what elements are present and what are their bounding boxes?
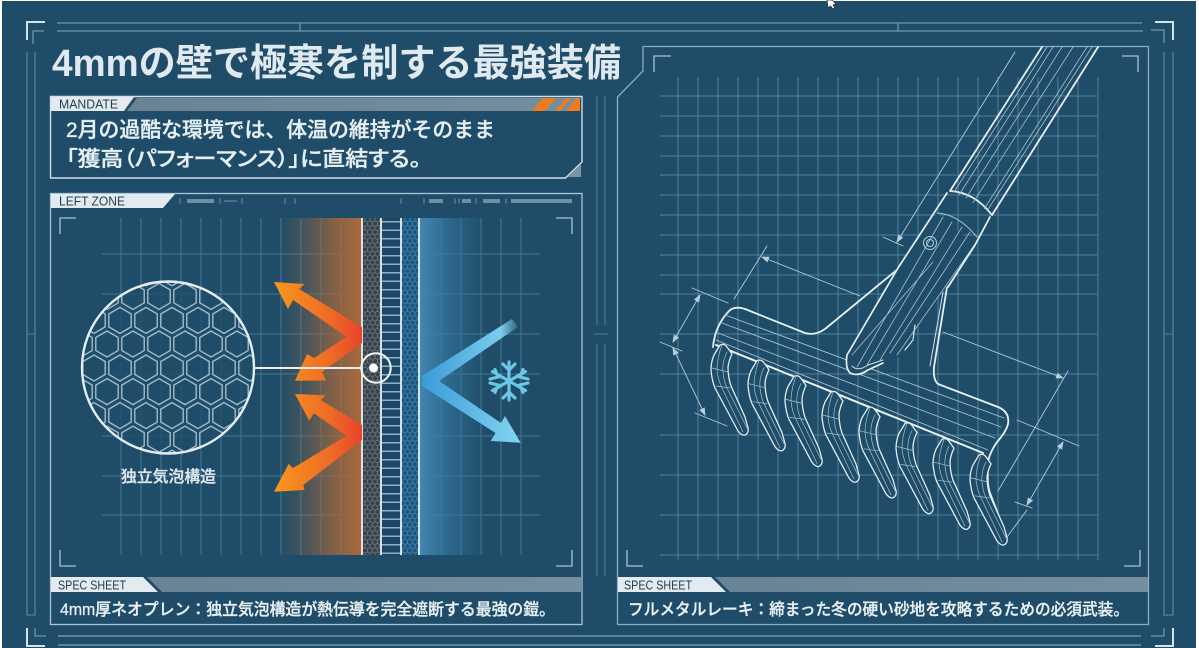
- bolt: [924, 236, 936, 250]
- rake head: [713, 269, 1008, 535]
- spec text: フルメタルレーキ：締まった冬の硬い砂地を攻略するための必須武装。: [628, 600, 1129, 619]
- neoprene wall cross-section: [362, 218, 419, 555]
- left zone tab: [51, 194, 175, 208]
- cold gradient zone: [419, 218, 487, 555]
- magnified closed-cell circle: [80, 280, 256, 456]
- socket: [846, 213, 975, 374]
- grid: [102, 218, 540, 555]
- panel: mandate: [50, 96, 582, 178]
- arrow: heat reflected lower: [274, 394, 362, 492]
- header tick bars: [180, 198, 506, 204]
- mandate text: [66, 119, 495, 171]
- mandate header strip: [127, 98, 580, 111]
- panel: left zone: [50, 194, 582, 624]
- icon: snowflake: [490, 362, 528, 400]
- spec text: 4mm厚ネオプレン：独立気泡構造が熱伝導を完全遮断する最強の鎧。: [60, 599, 555, 619]
- cursor icon: [827, 0, 836, 9]
- arrow: heat reflected upper: [274, 282, 362, 381]
- callout line and marker: [254, 353, 391, 383]
- title: 4mmの壁で極寒を制する最強装備: [52, 43, 621, 85]
- mandate text: 2月の過酷な環境では、体温の維持がそのまま: [66, 119, 495, 142]
- arrow: cold deflected: [422, 319, 521, 443]
- spec tab label: SPEC SHEET: [624, 578, 692, 592]
- left zone tab label: LEFT ZONE: [59, 194, 125, 208]
- corner notch: [568, 164, 581, 177]
- panel: right rake blueprint: [618, 46, 1148, 624]
- mandate text: 「獲高（パフォーマンス）」に直結する。: [66, 148, 421, 171]
- warm gradient zone: [278, 218, 362, 555]
- grid: [660, 77, 1098, 560]
- corner brackets: [627, 56, 1140, 566]
- spec tab label: SPEC SHEET: [58, 578, 126, 592]
- spec tab: [51, 577, 158, 592]
- corner brackets: [60, 218, 572, 566]
- rake illustration: [660, 47, 1098, 545]
- circle caption: 独立気泡構造: [121, 468, 216, 486]
- mandate tab: [51, 97, 134, 111]
- ferrule and collar: [948, 191, 992, 287]
- mandate tab label: MANDATE: [59, 96, 118, 112]
- tines: [711, 344, 748, 435]
- handle: [950, 47, 1098, 215]
- orange hazard stripes: [532, 98, 580, 111]
- dimension lines: [660, 52, 1079, 537]
- panel: left spec sheet: [51, 577, 582, 619]
- spec tab: [618, 577, 726, 592]
- panel: right spec sheet: [618, 577, 1148, 619]
